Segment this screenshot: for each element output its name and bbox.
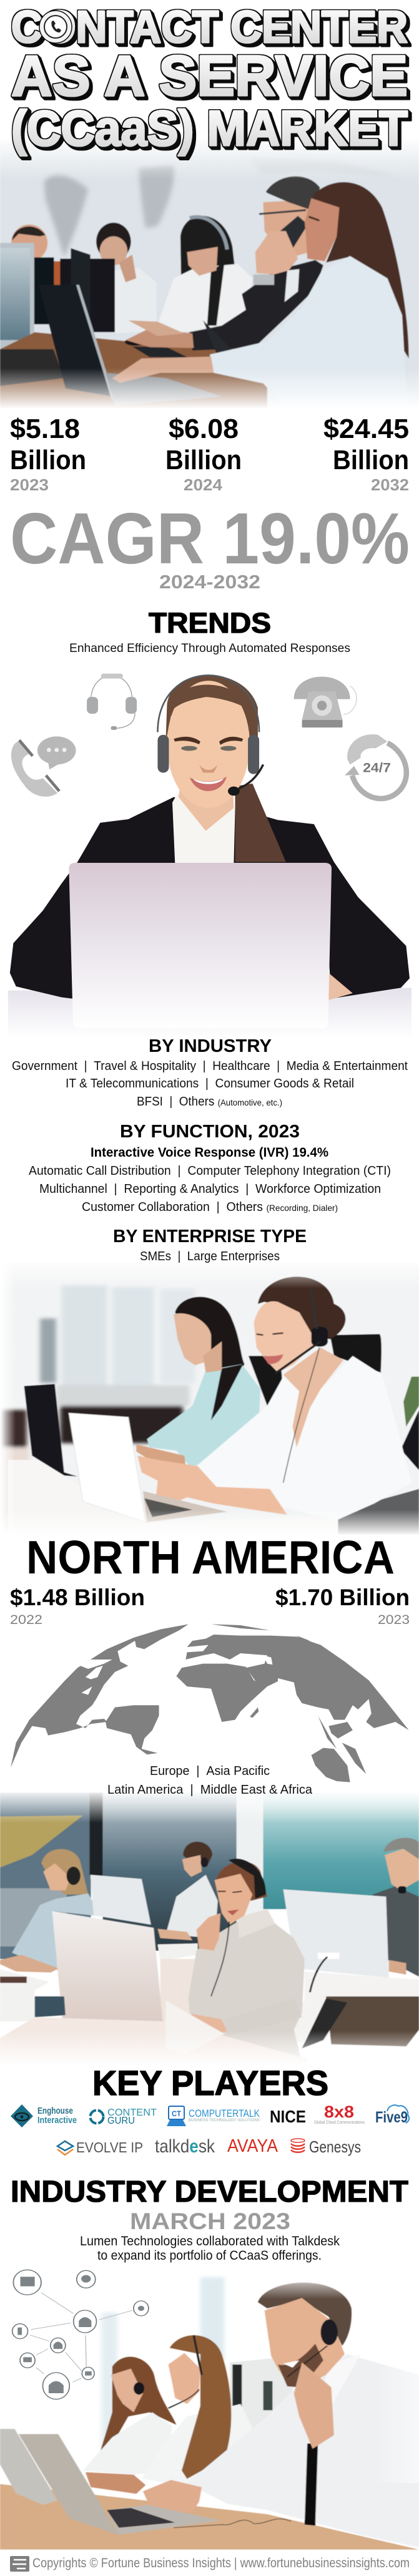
stat: 2032 market size: Billion: [333, 445, 409, 475]
stat: north america 2022: $1.48 Billion: [10, 1585, 145, 1610]
section: by function: Customer Collaboration | Others (Recording, Dialer): [82, 1200, 338, 1214]
stat: 2024 market size: [165, 414, 242, 494]
section: by industry: BFSI | Others (Automotive, etc.): [137, 1095, 282, 1109]
logo: ComputerTalk: [167, 2106, 260, 2126]
section: by function: [29, 1122, 391, 1214]
photo: open-plan call centre: [0, 1789, 419, 2070]
stat: 2023 market size: 2023: [10, 475, 49, 494]
front laptop: [19, 2434, 119, 2535]
logo: ComputerTalk: COMPUTERTALK: [189, 2107, 260, 2119]
centre agent: [189, 1922, 305, 2063]
logo: Evolve IP: EVOLVE IP: [76, 2139, 143, 2156]
logo: Five9: Five9: [375, 2109, 408, 2126]
back man: [11, 225, 47, 261]
icon: rotary telephone: [294, 677, 357, 727]
far agent: [99, 2357, 176, 2456]
section: by industry: [12, 1036, 408, 1109]
development description: Lumen Technologies collaborated with Talkdesk: [80, 2234, 340, 2248]
icon: phone in letter O: [39, 11, 72, 43]
logo: 8x8: Global Cloud Communications: [314, 2121, 365, 2125]
rear laptop: [24, 1384, 77, 1477]
logo: Enghouse Interactive: Enghouse: [37, 2106, 73, 2116]
development description: [80, 2234, 340, 2263]
chair base: [338, 1489, 419, 1535]
section: by enterprise type: [113, 1227, 307, 1263]
logo: Talkdesk: talkdesk: [155, 2136, 215, 2157]
centre woman: [180, 216, 235, 326]
man with phone: [189, 260, 323, 351]
icon: Fortune Business Insights logo: [10, 2556, 29, 2572]
big monitor: [52, 1911, 164, 2038]
section: by function: BY FUNCTION, 2023: [120, 1122, 300, 1142]
section: by industry: IT & Telecommunications | Consumer Goods & Retail: [66, 1077, 354, 1091]
photo: three agents with laptops: [0, 2270, 419, 2555]
other regions list: [107, 1764, 313, 1797]
section: by function: Multichannel | Reporting & Analytics | Workforce Optimization: [39, 1182, 381, 1196]
photo: two agents at laptops: [0, 1257, 419, 1540]
front laptop: [69, 1413, 145, 1522]
front hand: [143, 2480, 202, 2512]
stat: 2032 market size: 2032: [371, 475, 409, 494]
logo: Content Guru: GURU: [107, 2116, 135, 2126]
middle agent: [142, 2404, 255, 2485]
company logos: [11, 2102, 409, 2157]
logo: Avaya: AVAYA: [227, 2136, 279, 2156]
icon: handset and chat bubble: [11, 736, 76, 797]
table: [8, 1460, 338, 1535]
logo: NICE: NICE: [270, 2107, 306, 2126]
table: [0, 2484, 419, 2550]
laptop: [69, 863, 332, 1028]
development description: to expand its portfolio of CCaaS offerings.: [97, 2248, 322, 2263]
front agent: [187, 2354, 419, 2547]
desk: [0, 332, 267, 410]
hands on desk: [126, 328, 194, 348]
heading: trends: TRENDS: [149, 607, 271, 639]
logo: Genesys: Genesys: [309, 2137, 361, 2156]
monitors: [0, 243, 34, 349]
stat: 2024 market size: 2024: [184, 475, 223, 494]
logo: Content Guru: CONTENT: [107, 2107, 157, 2118]
stat: north america 2022: 2022: [10, 1613, 42, 1627]
icon: 24/7 clock: [345, 734, 407, 799]
left agent: [41, 1849, 88, 1895]
logo: Content Guru: [90, 2107, 157, 2126]
globe map: [11, 1624, 409, 1782]
stat: 2032 market size: [323, 414, 409, 494]
agent figure: [8, 675, 412, 1038]
stat: north america 2023: [275, 1585, 410, 1627]
logo: ComputerTalk: BUSINESS TECHNOLOGY SOLUTIONS: [189, 2119, 260, 2122]
section: by enterprise type: BY ENTERPRISE TYPE: [113, 1227, 307, 1247]
stat: 2024 market size: $6.08: [169, 414, 239, 444]
rear agent: [175, 1297, 245, 1421]
title: CONTACT CENTER: [11, 2, 408, 52]
stat: north america 2023: 2023: [378, 1613, 410, 1627]
back woman: [96, 223, 131, 261]
stat: 2023 market size: Billion: [10, 445, 86, 475]
icon: headset: [87, 674, 137, 730]
back monitor and agent: [183, 1842, 212, 1867]
logo: ComputerTalk: CT: [172, 2109, 182, 2118]
other regions list: Latin America | Middle East & Africa: [107, 1783, 313, 1797]
illustration: agent with laptop and contact icons: [8, 674, 412, 1038]
icon: 24/7 clock: 24/7: [363, 761, 391, 775]
section: by function: Automatic Call Distribution | Computer Telephony Integration (CTI): [29, 1164, 391, 1178]
heading: industry development: INDUSTRY DEVELOPMENT: [11, 2175, 408, 2209]
stat: 2032 market size: $24.45: [323, 414, 409, 444]
heading: north america: NORTH AMERICA: [26, 1531, 395, 1583]
section: by industry: Government | Travel & Hospitality | Healthcare | Media & Entertainment: [12, 1059, 408, 1073]
stat: 2024 market size: Billion: [165, 445, 242, 475]
logo: Enghouse Interactive: Interactive: [37, 2115, 77, 2126]
stat: 2023 market size: $5.18: [10, 414, 80, 444]
left laptop: [0, 2429, 57, 2505]
logo: Genesys: [291, 2137, 361, 2156]
photo: call centre team with world map: [0, 136, 419, 414]
CAGR figure: 2024-2032: [159, 571, 260, 593]
right agent: [373, 1886, 419, 1976]
development date: MARCH 2023: [130, 2209, 290, 2234]
laptop: [39, 285, 112, 397]
trend description: Enhanced Efficiency Through Automated Responses: [69, 642, 350, 655]
logo: 8x8: 8x8: [324, 2102, 354, 2121]
front agent: [258, 1276, 345, 1339]
foreground woman: [313, 182, 409, 359]
heading: key players: KEY PLAYERS: [92, 2063, 328, 2102]
title: [11, 2, 408, 156]
network of contact icons: [12, 2270, 149, 2399]
logo: 8x8: [314, 2102, 365, 2125]
section: by industry: BY INDUSTRY: [149, 1036, 272, 1056]
logo: Enghouse Interactive: [11, 2104, 77, 2127]
stat: 2023 market size: [10, 414, 86, 494]
section: by enterprise type: SMEs | Large Enterprises: [140, 1250, 280, 1263]
title: AS A SERVICE: [11, 44, 408, 108]
other regions list: Europe | Asia Pacific: [150, 1764, 270, 1778]
stat: north america 2022: [10, 1585, 145, 1627]
section: by function: Interactive Voice Response (IVR) 19.4%: [91, 1145, 328, 1160]
stat: north america 2023: $1.70 Billion: [275, 1585, 410, 1610]
